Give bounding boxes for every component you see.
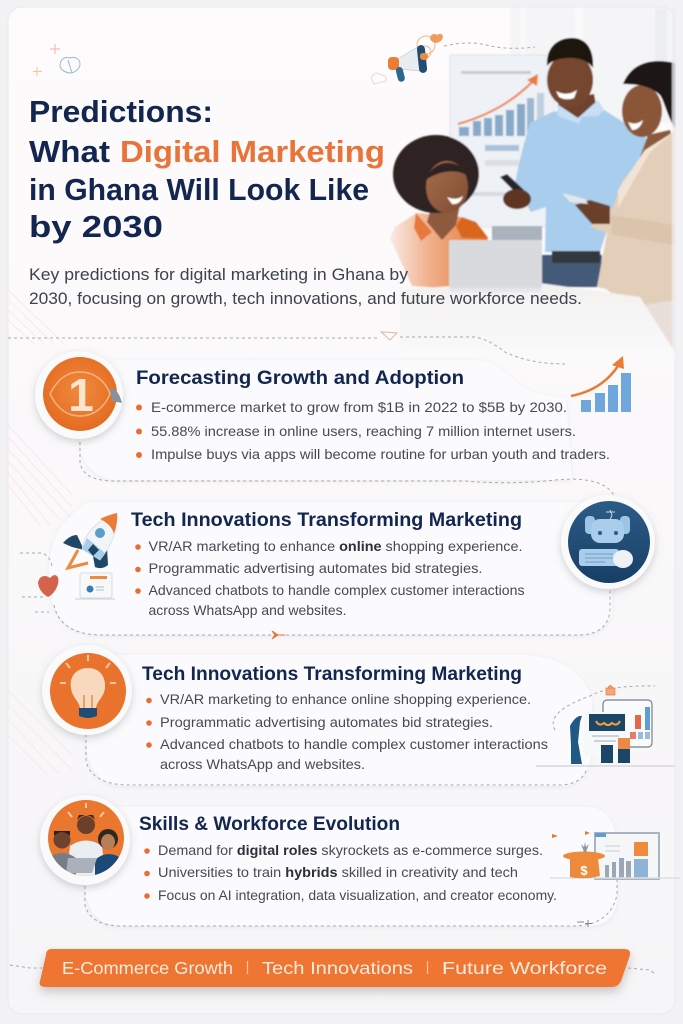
title: Predictions: xyxy=(29,94,213,129)
right fade edge xyxy=(672,10,675,350)
icon: team badge xyxy=(40,795,130,885)
bullet list: Programmatic advertising automates bid strategies. xyxy=(160,715,493,730)
icon: team building dashboard xyxy=(536,700,675,766)
route markers xyxy=(577,920,592,927)
title: by 2030 xyxy=(29,209,163,244)
panel: skills and workforce xyxy=(40,795,680,927)
icon: number one badge: 1 xyxy=(68,369,94,421)
divider route xyxy=(8,337,565,364)
banner xyxy=(40,949,630,987)
heading: Skills & Workforce Evolution xyxy=(139,814,400,835)
title: in Ghana Will Look Like xyxy=(29,172,369,207)
decorative background xyxy=(8,290,72,775)
bullet list: Focus on AI integration, data visualization, and creator economy. xyxy=(158,888,557,903)
icon: number one badge xyxy=(35,351,123,439)
banner side routes xyxy=(10,965,655,974)
bullet list: Universities to train hybrids skilled in creativity and tech xyxy=(158,865,518,880)
dashed route 4 xyxy=(85,880,617,926)
title: What xyxy=(29,134,110,169)
icon: robot chatbot badge xyxy=(561,495,655,589)
subtitle: 2030, focusing on growth, tech innovations, and future workforce needs. xyxy=(29,290,582,308)
bullet list xyxy=(146,692,548,772)
icon: lightbulb badge xyxy=(42,645,132,735)
bullet list: Impulse buys via apps will become routine for urban youth and traders. xyxy=(151,447,610,462)
bullet list: Programmatic advertising automates bid strategies. xyxy=(148,561,482,576)
subtitle xyxy=(29,266,582,308)
bullet list xyxy=(135,539,525,618)
panel: forecasting growth xyxy=(35,351,631,500)
route top right xyxy=(553,686,655,730)
panel: tech innovations 1 xyxy=(20,495,655,639)
icon: money hat and dashboard xyxy=(550,831,680,879)
icon: browser window xyxy=(75,573,115,599)
icon: small bag xyxy=(606,686,615,695)
dashed route 1 xyxy=(80,436,616,500)
bullet list: VR/AR marketing to enhance online shopping experience. xyxy=(160,692,531,707)
bullet list: Demand for digital roles skyrockets as e-commerce surges. xyxy=(158,843,543,858)
icon: small divider heart xyxy=(381,332,397,340)
icon: money hat and dashboard: $ xyxy=(580,863,588,878)
hero photo: office team xyxy=(390,8,675,358)
heading: Forecasting Growth and Adoption xyxy=(136,368,464,389)
icon: megaphone xyxy=(371,34,535,84)
man in blue shirt xyxy=(500,38,650,287)
dashed route 2 xyxy=(54,585,610,635)
woman in beige blazer xyxy=(562,61,675,352)
banner: Future Workforce xyxy=(442,958,607,978)
bullet list: VR/AR marketing to enhance online shopping experience. xyxy=(148,539,522,554)
icon: growth bar chart xyxy=(571,356,631,412)
heading: Tech Innovations Transforming Marketing xyxy=(131,510,522,531)
bullet list: across WhatsApp and websites. xyxy=(160,757,365,772)
title xyxy=(29,94,385,244)
arrow marker xyxy=(272,631,285,639)
icon: top-left sparkles and heart xyxy=(33,44,80,76)
panel: tech innovations 2 xyxy=(42,645,675,786)
side route marks xyxy=(20,553,52,612)
title: Digital Marketing xyxy=(120,134,385,169)
bullet list: E-commerce market to grow from $1B in 2022 to $5B by 2030. xyxy=(151,400,567,415)
bullet list: across WhatsApp and websites. xyxy=(148,603,346,618)
window background xyxy=(510,8,675,123)
table surface xyxy=(400,283,675,358)
bullet list xyxy=(144,843,557,903)
heading: Tech Innovations Transforming Marketing xyxy=(142,664,522,685)
icon: heart xyxy=(38,575,58,597)
bullet list xyxy=(136,400,610,462)
subtitle: Key predictions for digital marketing in Ghana by xyxy=(29,266,409,284)
dashed route 3 xyxy=(86,728,587,785)
laptop xyxy=(449,240,542,292)
banner: Tech Innovations xyxy=(262,958,413,978)
icon: rocket xyxy=(63,513,117,568)
banner: E-Commerce Growth xyxy=(62,958,233,978)
bullet list: 55.88% increase in online users, reaching 7 million internet users. xyxy=(151,424,576,439)
bullet list: Advanced chatbots to handle complex customer interactions xyxy=(160,737,548,752)
seated woman in orange blouse xyxy=(390,135,488,290)
whiteboard chart xyxy=(450,55,554,240)
bullet list: Advanced chatbots to handle complex customer interactions xyxy=(148,583,525,598)
